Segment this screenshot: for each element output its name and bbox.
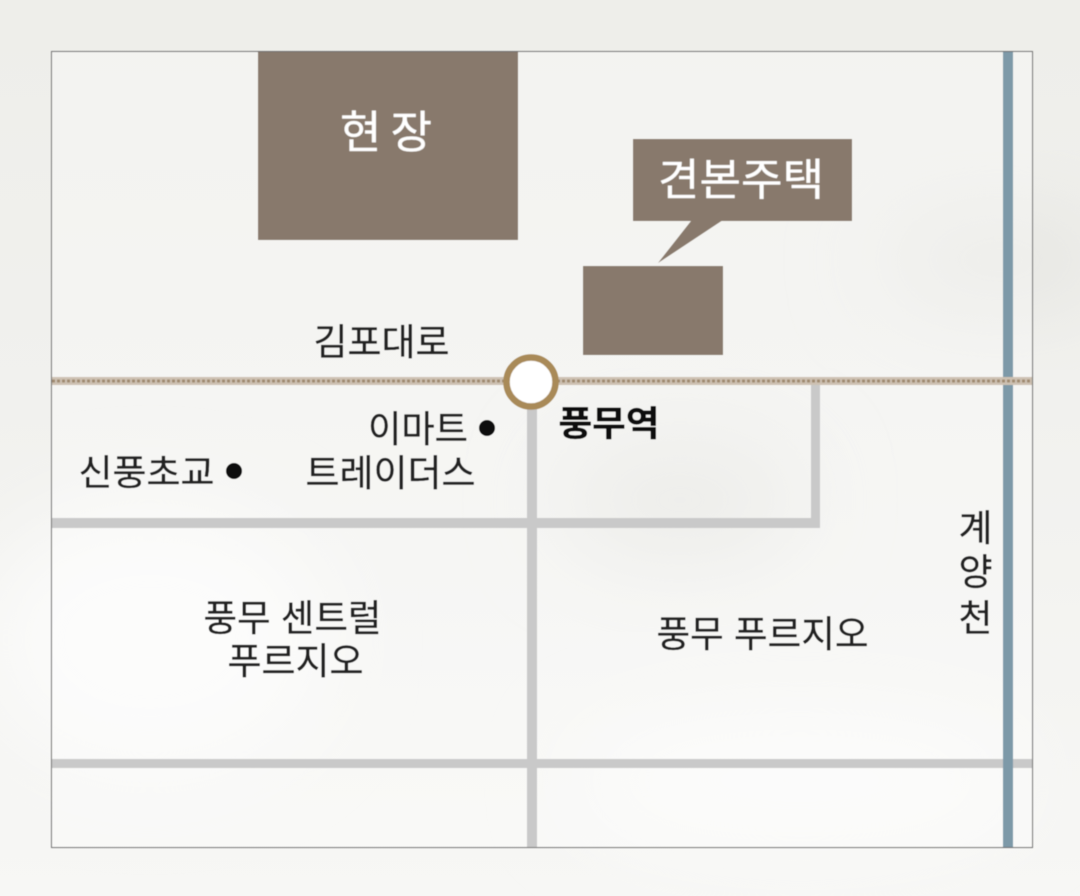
label: 계양천: 계	[958, 508, 993, 549]
callout: 견본주택: 견본주택	[658, 156, 824, 205]
station marker	[506, 358, 556, 406]
label: 이마트: 이마트	[368, 409, 468, 450]
label: 김포대로: 김포대로	[314, 322, 450, 363]
label: 계양천: 천	[958, 598, 993, 639]
callout: 견본주택	[633, 139, 852, 263]
stream line: 계양천	[1003, 52, 1013, 847]
site block: 현장	[258, 52, 518, 240]
roads	[52, 381, 1032, 847]
label: 풍무 센트럴 푸르지오	[204, 598, 382, 682]
label: 계양천: 양	[958, 552, 993, 593]
site block: 현장: 현 장	[340, 107, 432, 158]
main road: 김포대로	[52, 377, 1032, 385]
label: 풍무 센트럴 푸르지오: 푸르지오	[228, 641, 364, 682]
label: 신풍초교: 신풍초교	[78, 452, 214, 493]
label: 트레이더스: 트레이더스	[306, 453, 476, 494]
label: 계양천	[958, 508, 993, 639]
label: 풍무 푸르지오: 풍무 푸르지오	[656, 614, 868, 655]
show house block	[583, 266, 723, 355]
label: 풍무 센트럴 푸르지오: 풍무 센트럴	[204, 598, 382, 639]
label: 풍무역: 풍무역	[558, 405, 660, 444]
